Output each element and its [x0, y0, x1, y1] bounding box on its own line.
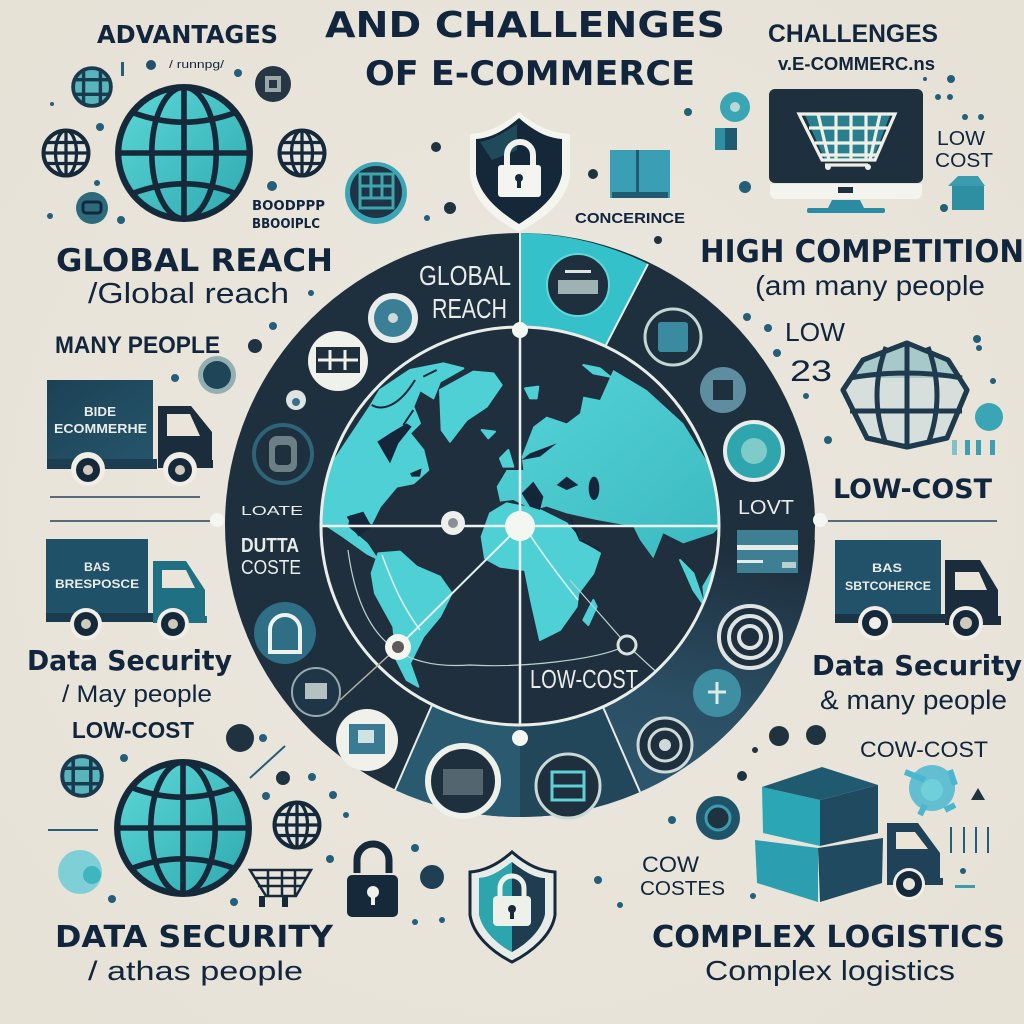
icon: truck: BAS [84, 560, 110, 574]
icon: truck: BIDE [84, 404, 116, 419]
panel: low-cost right [743, 313, 1003, 505]
labels in ring: REACH [432, 293, 507, 324]
label: low-cost: LOW-COST [72, 717, 194, 743]
title [325, 5, 725, 94]
panel: data security right [812, 540, 1022, 715]
panel: complex logistics [640, 725, 1005, 986]
label: low 23: LOW [785, 317, 845, 347]
labels in ring: GLOBAL [419, 260, 511, 291]
dots [47, 62, 314, 296]
divider [50, 497, 997, 521]
icon: small badge [171, 322, 277, 394]
icon: small globes [58, 724, 320, 894]
heading: data security: Data Security [27, 644, 232, 677]
heading: low-cost: LOW-COST [833, 474, 993, 505]
icon: teal gear [905, 765, 955, 815]
labels in ring: LOATE [241, 503, 303, 518]
small caption: / runnpg/ [169, 59, 225, 71]
icon: truck [46, 539, 207, 640]
ring icons [253, 254, 798, 818]
dots [424, 108, 751, 244]
dots [668, 725, 989, 899]
segment: teal top [520, 233, 648, 347]
icon: online store badge [345, 162, 407, 224]
dots [923, 75, 984, 212]
icon: truck: BAS [872, 561, 902, 575]
label: low cost: COST [935, 150, 993, 172]
title: OF E-COMMERCE [365, 54, 695, 94]
bottom box [755, 840, 818, 902]
icon: small globes [44, 66, 324, 224]
cart [799, 114, 895, 170]
heading: many people: MANY PEOPLE [55, 332, 220, 359]
continent: greenland [440, 372, 502, 442]
seas [347, 423, 599, 537]
chart: central ring diagram [210, 233, 827, 818]
heading: challenges: CHALLENGES [768, 20, 938, 48]
icon: truck [47, 380, 213, 486]
heading: data security: DATA SECURITY [55, 920, 334, 955]
panel: data security left [27, 539, 232, 743]
icon: monitor with cart [769, 89, 923, 213]
label: cow costes: COSTES [640, 878, 725, 900]
route lines [348, 550, 665, 680]
continent: north america [320, 363, 463, 558]
dots [743, 313, 996, 444]
label: convenience: CONCERINCE [575, 210, 685, 227]
labels in ring [241, 260, 794, 694]
segment: bottom right [520, 707, 640, 817]
icon: shopping cart [250, 870, 311, 907]
label: cow costes [640, 852, 725, 900]
continent: eurasia [497, 370, 723, 558]
continent: africa [482, 503, 600, 640]
crosshair lines [321, 327, 719, 725]
heading: data security: Data Security [812, 649, 1022, 682]
subheading: /Global reach [88, 278, 289, 310]
icon: padlock [347, 844, 398, 917]
subheading: / athas people [88, 956, 303, 986]
panel: challenges top right [700, 20, 1024, 301]
inner circle outline [321, 327, 719, 725]
icon: delivery truck [887, 823, 943, 900]
panel: data security bottom left [48, 724, 623, 986]
icon: truck: ECOMMERHE [54, 421, 147, 436]
world map [322, 362, 718, 688]
subheading: & many people [820, 685, 1007, 715]
icon: truck: SBTCOHERCE [845, 579, 931, 593]
icon: parcel [948, 176, 985, 210]
icon: top shield [470, 112, 570, 232]
icon: ring badge [696, 796, 740, 840]
dots [48, 734, 623, 925]
subheading: e-commerce: v.E-COMMERC.ns [778, 54, 935, 74]
labels in ring: COSTE [241, 557, 301, 579]
small caption [146, 59, 325, 232]
heading: advantages: ADVANTAGES [97, 20, 278, 49]
continent: asia islands [482, 365, 720, 607]
panel: convenience [424, 92, 751, 244]
title: AND CHALLENGES [325, 5, 725, 46]
labels in ring: LOVT [738, 497, 794, 519]
ring base [225, 233, 815, 817]
continent: south america [372, 552, 452, 687]
spoke lines [395, 233, 648, 792]
labels in ring: LOW-COST [530, 664, 638, 694]
subheading: Complex logistics [705, 955, 955, 986]
icon: stacked boxes [755, 767, 883, 902]
label: low 23 [785, 317, 845, 388]
icon: target badge [715, 92, 750, 150]
segment: bottom left [395, 705, 520, 817]
panel: many people truck [47, 322, 277, 486]
icon: truck: BRESPOSCE [55, 577, 139, 591]
subheading: (am many people [755, 270, 985, 301]
label: cow-cost: COW-COST [860, 737, 988, 762]
icon: main globe [118, 87, 250, 219]
icon: truck [835, 540, 1001, 640]
heading: complex logistics: COMPLEX LOGISTICS [652, 920, 1005, 955]
small caption: BBOOIPLC [252, 217, 320, 232]
segment: lower right [603, 540, 815, 792]
icon: small teal badge [952, 403, 1003, 455]
icon: box [610, 150, 670, 198]
icon: main globe [117, 762, 249, 894]
node markers [210, 322, 827, 746]
labels in ring: DUTTA [241, 535, 299, 557]
heading: global reach: GLOBAL REACH [56, 243, 333, 279]
small caption: BOODPPP [252, 199, 325, 214]
label: cow costes: COW [642, 852, 699, 877]
panel: advantages top left [44, 20, 333, 310]
icon: wide globe [843, 343, 967, 447]
label: low cost: LOW [937, 128, 985, 150]
label: low 23: 23 [790, 355, 832, 388]
subheading: / May people [62, 681, 212, 708]
icon: bottom shield [470, 852, 555, 962]
top box [762, 787, 820, 846]
label: low cost [935, 128, 993, 172]
